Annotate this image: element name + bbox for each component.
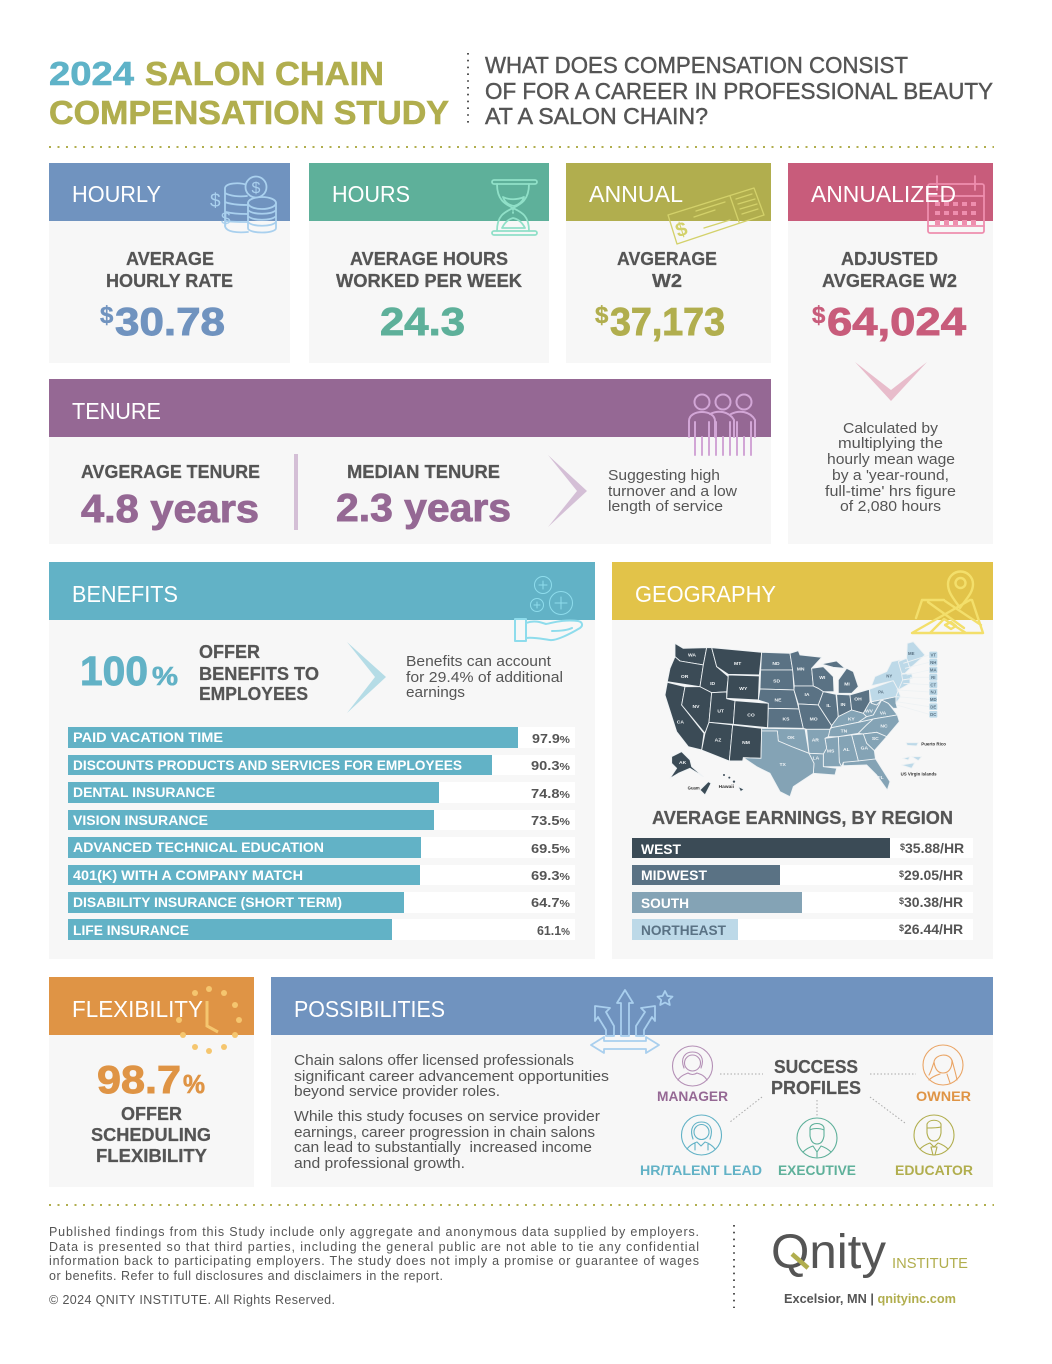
panel: tenure: AVGERAGE TENURE (81, 462, 260, 482)
map: US states by region: RI (931, 675, 935, 680)
map: US states by region: MS (827, 748, 835, 754)
subtitle: OF FOR A CAREER IN PROFESSIONAL BEAUTY (485, 78, 993, 104)
bar chart: benefits offered: 74.8 % (531, 787, 570, 801)
bar chart: earnings by region: NORTHEAST (641, 923, 727, 938)
text: calculation note: multiplying the (838, 435, 943, 452)
map: US states by region: AK (679, 760, 687, 766)
panel: hours: AVERAGE HOURS (350, 249, 508, 269)
icon: coins: $ (210, 191, 221, 212)
map: US states by region: NY (886, 674, 892, 679)
map: US states by region: TN (841, 729, 848, 735)
bar chart: earnings by region (632, 838, 973, 940)
text: calculation note: full-time' hrs figure (825, 483, 956, 500)
map: US states by region: NH (930, 660, 936, 665)
panel: flexibility (49, 977, 254, 1187)
text: possibilities body: beyond service provider roles. (294, 1083, 500, 1100)
map: US states by region: WY (739, 686, 748, 692)
bar chart: benefits offered: 69.3 % (531, 869, 570, 883)
map: US states by region: FL (878, 775, 884, 781)
map: US states by region: ID (710, 681, 716, 687)
map: US states by region: Guam (688, 786, 700, 791)
icon: people (689, 394, 755, 455)
subtitle: WHAT DOES COMPENSATION CONSIST (485, 52, 908, 78)
bar chart: benefits offered: PAID VACATION TIME (73, 730, 223, 745)
map: US states by region: Hawaii (719, 784, 734, 789)
map: US states by region: NM (742, 740, 750, 746)
panel: flexibility: SCHEDULING (91, 1125, 211, 1145)
map: US states by region: AR (812, 737, 819, 743)
map: US states by region: PA (878, 689, 885, 694)
map: US states by region: MN (797, 667, 805, 673)
map: US states by region: UT (717, 708, 724, 714)
panel: hourly: $ (100, 302, 114, 329)
map: US states by region: DC (930, 712, 936, 717)
bar chart: earnings by region: 26.44/HR (904, 921, 963, 937)
text: tenure note (608, 467, 737, 515)
text: calculation note: of 2,080 hours (840, 498, 941, 515)
icon: hr talent lead (682, 1115, 722, 1155)
success profiles diagram (640, 1045, 973, 1178)
text: possibilities body: Chain salons offer licensed professionals (294, 1052, 574, 1069)
panel: benefits: OFFER (199, 642, 260, 662)
icon: manager (672, 1046, 712, 1086)
panel: flexibility: FLEXIBILITY (96, 1146, 207, 1166)
bar chart: benefits offered: LIFE INSURANCE (73, 923, 189, 938)
map: US states by region: IN (840, 702, 846, 708)
icon: branching arrows (591, 990, 672, 1053)
panel: annual: AVGERAGE (617, 249, 717, 269)
bar chart: earnings by region: 35.88/HR (905, 840, 964, 856)
map: US states by region: OR (681, 674, 689, 680)
map: US states by region: IA (804, 692, 810, 698)
bar chart: earnings by region: $ (900, 842, 905, 852)
icon: hand with plus coins (515, 576, 582, 641)
map: US states by region: NC (880, 724, 888, 730)
map: US states by region: VA (880, 711, 887, 717)
logo: Qnity Institute: INSTITUTE (892, 1256, 968, 1272)
map: US states by region: OK (787, 735, 795, 741)
arrow: right chevron (548, 455, 587, 527)
map: US states by region: WI (819, 675, 826, 681)
bar chart: benefits offered: DISCOUNTS PRODUCTS AND SERVICES FOR EMPLOYEES (73, 758, 462, 773)
text: possibilities body: While this study focuses on service provider (294, 1108, 600, 1125)
map: US states by region: NE (775, 697, 782, 703)
text: benefits note: Benefits can account (406, 653, 552, 670)
panel: tenure: 2.3 years (336, 487, 511, 530)
map: US states by region: KS (783, 717, 790, 723)
bar chart: benefits offered: 61.1% (537, 924, 570, 938)
success profiles diagram: EXECUTIVE (778, 1163, 856, 1178)
footer disclaimer: information back to participating employers. The study does not imply a promise or guarantee of wages (49, 1254, 699, 1268)
text: possibilities body: significant career advancement opportunities (294, 1068, 609, 1085)
bar chart: earnings by region: $ (899, 923, 904, 933)
text: tenure note: turnover and a low (608, 483, 737, 500)
success profiles diagram: HR/TALENT LEAD (640, 1163, 762, 1178)
map: US states by region (665, 642, 946, 797)
icon: hourglass (492, 180, 537, 235)
panel: geography (612, 562, 993, 959)
map: US states by region: AL (843, 747, 850, 753)
bar chart: earnings by region: $ (899, 896, 904, 906)
panel: hours (309, 163, 549, 363)
panel: hourly: HOURLY RATE (106, 271, 233, 291)
panel: annual: 37,173 (610, 301, 725, 344)
text: possibilities body: earnings, career progression in chain salons (294, 1124, 595, 1141)
map: US states by region: WV (865, 709, 874, 715)
map: US states by region: IL (826, 703, 831, 709)
panel: hourly: HOURLY (72, 181, 161, 207)
text: benefits note: for 29.4% of additional (406, 669, 563, 686)
panel: hourly: AVERAGE (126, 249, 214, 269)
success profiles diagram: OWNER (916, 1089, 971, 1104)
panel: possibilities (271, 977, 993, 1187)
panel: annualized: ANNUALIZED (811, 181, 956, 207)
panel: flexibility: OFFER (121, 1104, 182, 1124)
footer disclaimer: Published findings from this Study include only aggregate and anonymous data supplied by employers. (49, 1225, 699, 1239)
success profiles diagram: SUCCESS (774, 1057, 858, 1077)
bar chart: earnings by region: MIDWEST (641, 868, 708, 883)
panel: benefits: BENEFITS TO (199, 664, 319, 684)
map: US states by region: LA (813, 755, 820, 761)
panel: geography: AVERAGE EARNINGS, BY REGION (652, 808, 953, 828)
map: US states by region: NJ (931, 690, 937, 695)
arrow: right chevron (347, 642, 386, 713)
icon: owner (923, 1045, 963, 1085)
icon: calendar (928, 176, 984, 233)
bar chart: earnings by region: $ (899, 869, 904, 879)
panel: hourly: 30.78 (115, 301, 225, 344)
panel: hours: HOURS (332, 181, 410, 207)
map: US states by region: OH (854, 697, 862, 703)
logo: Qnity Institute: Excelsior, MN | qnityinc.com (784, 1291, 956, 1306)
icon: educator (914, 1115, 954, 1155)
panel: tenure: 4.8 years (81, 488, 259, 531)
text: calculation note: Calculated by (843, 420, 939, 437)
panel: benefits: 100 (80, 648, 148, 694)
panel: flexibility: 98.7 (97, 1059, 181, 1102)
success profiles diagram: MANAGER (657, 1089, 728, 1104)
footer disclaimer (49, 1225, 699, 1307)
footer disclaimer: or benefits. Refer to full disclosures and disclaimers in the report. (49, 1269, 443, 1283)
map: US states by region: CA (677, 719, 684, 725)
panel: hours: WORKED PER WEEK (336, 271, 522, 291)
text: benefits note (406, 653, 563, 701)
bar chart: benefits offered: DENTAL INSURANCE (73, 785, 215, 800)
panel: annual (566, 163, 771, 363)
map: US states by region: MA (930, 668, 938, 673)
map: US states by region: NV (693, 704, 700, 710)
panel: annualized: ADJUSTED (841, 249, 938, 269)
title: SALON CHAIN (145, 55, 384, 92)
bar chart: earnings by region: 30.38/HR (904, 894, 963, 910)
icon: executive (797, 1118, 837, 1158)
panel: benefits (49, 562, 595, 959)
map: US states by region: CT (930, 682, 937, 687)
map: US states by region: Puerto Rico (921, 742, 946, 747)
map: US states by region: SD (773, 679, 781, 685)
arrow: down chevron (855, 362, 927, 401)
bar chart: benefits offered: 73.5 % (531, 814, 570, 828)
text: possibilities body: and professional growth. (294, 1155, 465, 1172)
bar chart: benefits offered: ADVANCED TECHNICAL EDUCATION (73, 840, 324, 855)
text: calculation note: hourly mean wage (827, 451, 955, 468)
map: US states by region: MT (734, 661, 741, 667)
icon: coins: $ (252, 180, 261, 197)
success profiles diagram: PROFILES (771, 1078, 861, 1098)
text: possibilities body: can lead to substantially increased income (294, 1139, 592, 1156)
map: US states by region: VT (931, 653, 936, 658)
map: US states by region: MI (844, 681, 850, 687)
text: benefits note: earnings (406, 684, 465, 701)
success profiles diagram: EDUCATOR (895, 1163, 973, 1178)
icon: coins (210, 176, 276, 232)
bar chart: benefits offered: VISION INSURANCE (73, 813, 208, 828)
panel: flexibility: % (183, 1069, 205, 1099)
map: US states by region: ME (908, 651, 915, 656)
map: US states by region: CO (747, 713, 755, 719)
footer disclaimer: © 2024 QNITY INSTITUTE. All Rights Reserved. (49, 1293, 335, 1307)
panel: tenure (49, 379, 771, 544)
text: tenure note: Suggesting high (608, 467, 720, 484)
bar chart: benefits offered: 97.9 % (532, 732, 570, 746)
panel: annualized (788, 163, 993, 544)
bar chart: earnings by region: SOUTH (641, 896, 689, 911)
map: US states by region: MD (930, 697, 937, 702)
panel: annualized: AVGERAGE W2 (822, 271, 957, 291)
title: COMPENSATION STUDY (49, 94, 449, 131)
panel: benefits: % (152, 661, 178, 691)
map: US states by region: KY (848, 717, 855, 723)
panel: possibilities: POSSIBILITIES (294, 996, 445, 1022)
map: US states by region: SC (872, 736, 879, 742)
subtitle: AT A SALON CHAIN? (485, 103, 708, 129)
text: calculation note (825, 420, 956, 515)
panel: annualized: 64,024 (827, 301, 966, 344)
icon: cheque (668, 188, 764, 244)
text: possibilities body (294, 1052, 609, 1172)
bar chart: benefits offered (68, 727, 575, 940)
map: US states by region: MO (810, 716, 818, 722)
bar chart: benefits offered: 69.5 % (531, 842, 570, 856)
panel: tenure: TENURE (72, 398, 161, 424)
bar chart: benefits offered: DISABILITY INSURANCE (SHORT TERM) (73, 895, 342, 910)
panel: geography: GEOGRAPHY (635, 581, 776, 607)
title (49, 55, 449, 131)
panel: annual: W2 (652, 271, 682, 291)
icon: map pin (912, 571, 983, 633)
text: calculation note: by a 'year-round, (832, 467, 949, 484)
footer disclaimer: Data is presented so that third parties, including the general public are not able to tie any confidential (49, 1240, 699, 1254)
logo: Qnity Institute (771, 1226, 968, 1306)
bar chart: earnings by region: 29.05/HR (904, 867, 963, 883)
map: US states by region: US Virgin Islands (901, 771, 937, 776)
map: US states by region: AZ (715, 738, 721, 744)
panel: annual: ANNUAL (589, 181, 683, 207)
panel: benefits: BENEFITS (72, 581, 178, 607)
title: 2024 (49, 55, 135, 92)
icon: clock (176, 986, 242, 1054)
panel: hourly (49, 163, 290, 363)
panel: tenure: MEDIAN TENURE (347, 462, 500, 482)
panel: annualized: $ (812, 302, 826, 329)
logo: Qnity Institute: Qnity (771, 1226, 886, 1279)
bar chart: earnings by region: WEST (641, 842, 682, 857)
map: US states by region: DE (930, 704, 936, 709)
map: US states by region: TX (779, 762, 787, 768)
panel: hours: 24.3 (380, 301, 465, 344)
map: US states by region: ND (772, 661, 780, 667)
map: US states by region: WA (688, 653, 696, 659)
panel: benefits: EMPLOYEES (199, 684, 308, 704)
bar chart: benefits offered: 90.3 % (531, 759, 570, 773)
map: US states by region: GA (861, 745, 868, 751)
icon: cheque: $ (673, 218, 690, 242)
bar chart: benefits offered: 64.7 % (531, 896, 570, 910)
bar chart: benefits offered: 401(K) WITH A COMPANY MATCH (73, 868, 303, 883)
panel: flexibility: FLEXIBILITY (72, 996, 203, 1022)
icon: coins: $ (221, 209, 231, 228)
subtitle (485, 52, 993, 129)
text: tenure note: length of service (608, 498, 723, 515)
panel: annual: $ (595, 302, 609, 329)
